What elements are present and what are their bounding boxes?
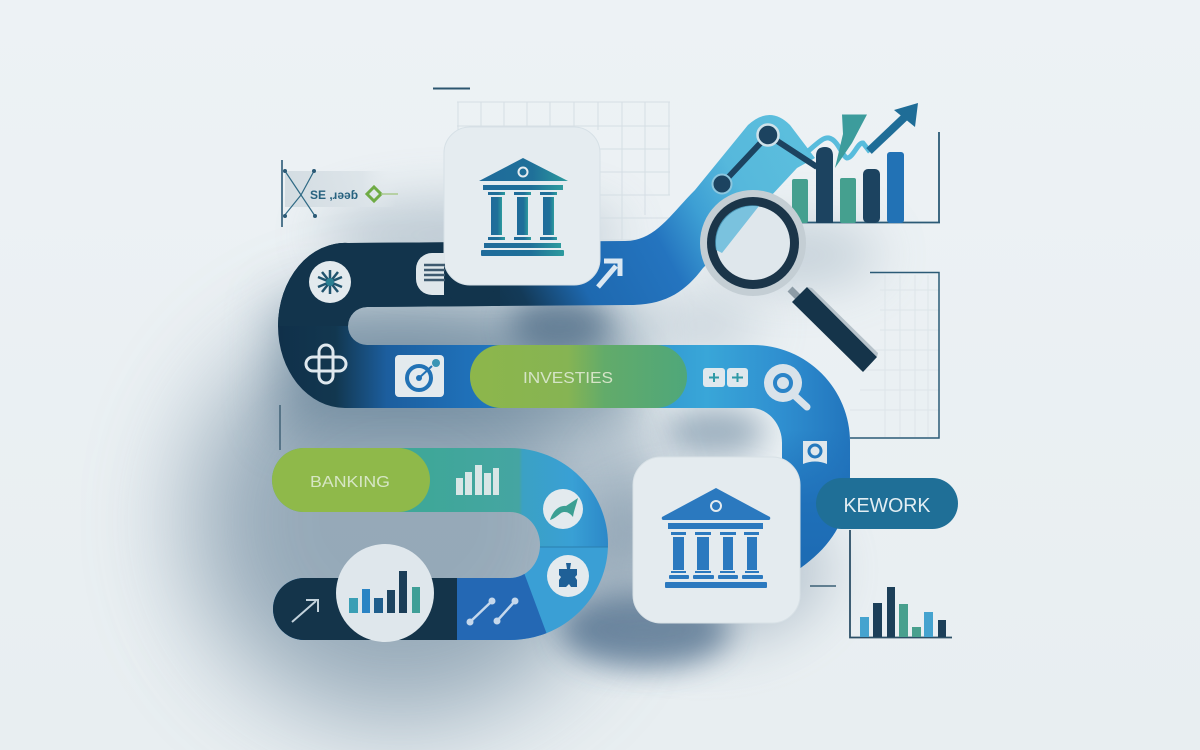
bank card: bottom (633, 457, 800, 623)
label pill: investies: INVESTIES (523, 370, 613, 387)
wavy ribbon (807, 138, 870, 158)
small dash (810, 585, 836, 587)
label pill: investies (470, 345, 687, 408)
target card icon (395, 355, 444, 397)
circle icon: bird (543, 489, 583, 529)
mini diagram with label: SE ,ɹəəɓ (310, 188, 358, 202)
road: lower serpentine band (272, 448, 608, 640)
arrow icon on band (598, 261, 620, 287)
line chart with nodes (712, 124, 817, 194)
star circle icon (309, 261, 351, 303)
knot icon (306, 345, 346, 383)
grid: right frame (850, 272, 939, 438)
grid: top centre (457, 102, 670, 240)
connected nodes icon (466, 598, 518, 626)
label pill: kework (816, 478, 958, 529)
bar chart: bottom right (850, 530, 952, 638)
top dash (433, 88, 470, 90)
big circle with bar chart (336, 544, 434, 642)
label pill: kework: KEWORK (844, 495, 931, 517)
bar chart: top right (762, 132, 940, 223)
mini diagram with label (282, 160, 398, 227)
magnifying glass (700, 190, 878, 372)
soft drop shadows (190, 200, 880, 720)
circle icon: puzzle (547, 555, 589, 597)
teal triangle marker (835, 114, 867, 168)
rising arrow (869, 103, 918, 151)
search icon (764, 364, 807, 407)
left connector line (279, 405, 281, 450)
road: upper band rising to the chart and lower band curving right (278, 115, 850, 568)
plus buttons (703, 368, 748, 387)
badge icon (803, 441, 827, 464)
label pill: banking (272, 448, 430, 512)
arrow icon: dark band (292, 600, 318, 622)
bank card: top (444, 127, 600, 285)
menu icon (416, 253, 445, 295)
label pill: banking: BANKING (310, 474, 390, 491)
small bars icon (456, 465, 499, 495)
